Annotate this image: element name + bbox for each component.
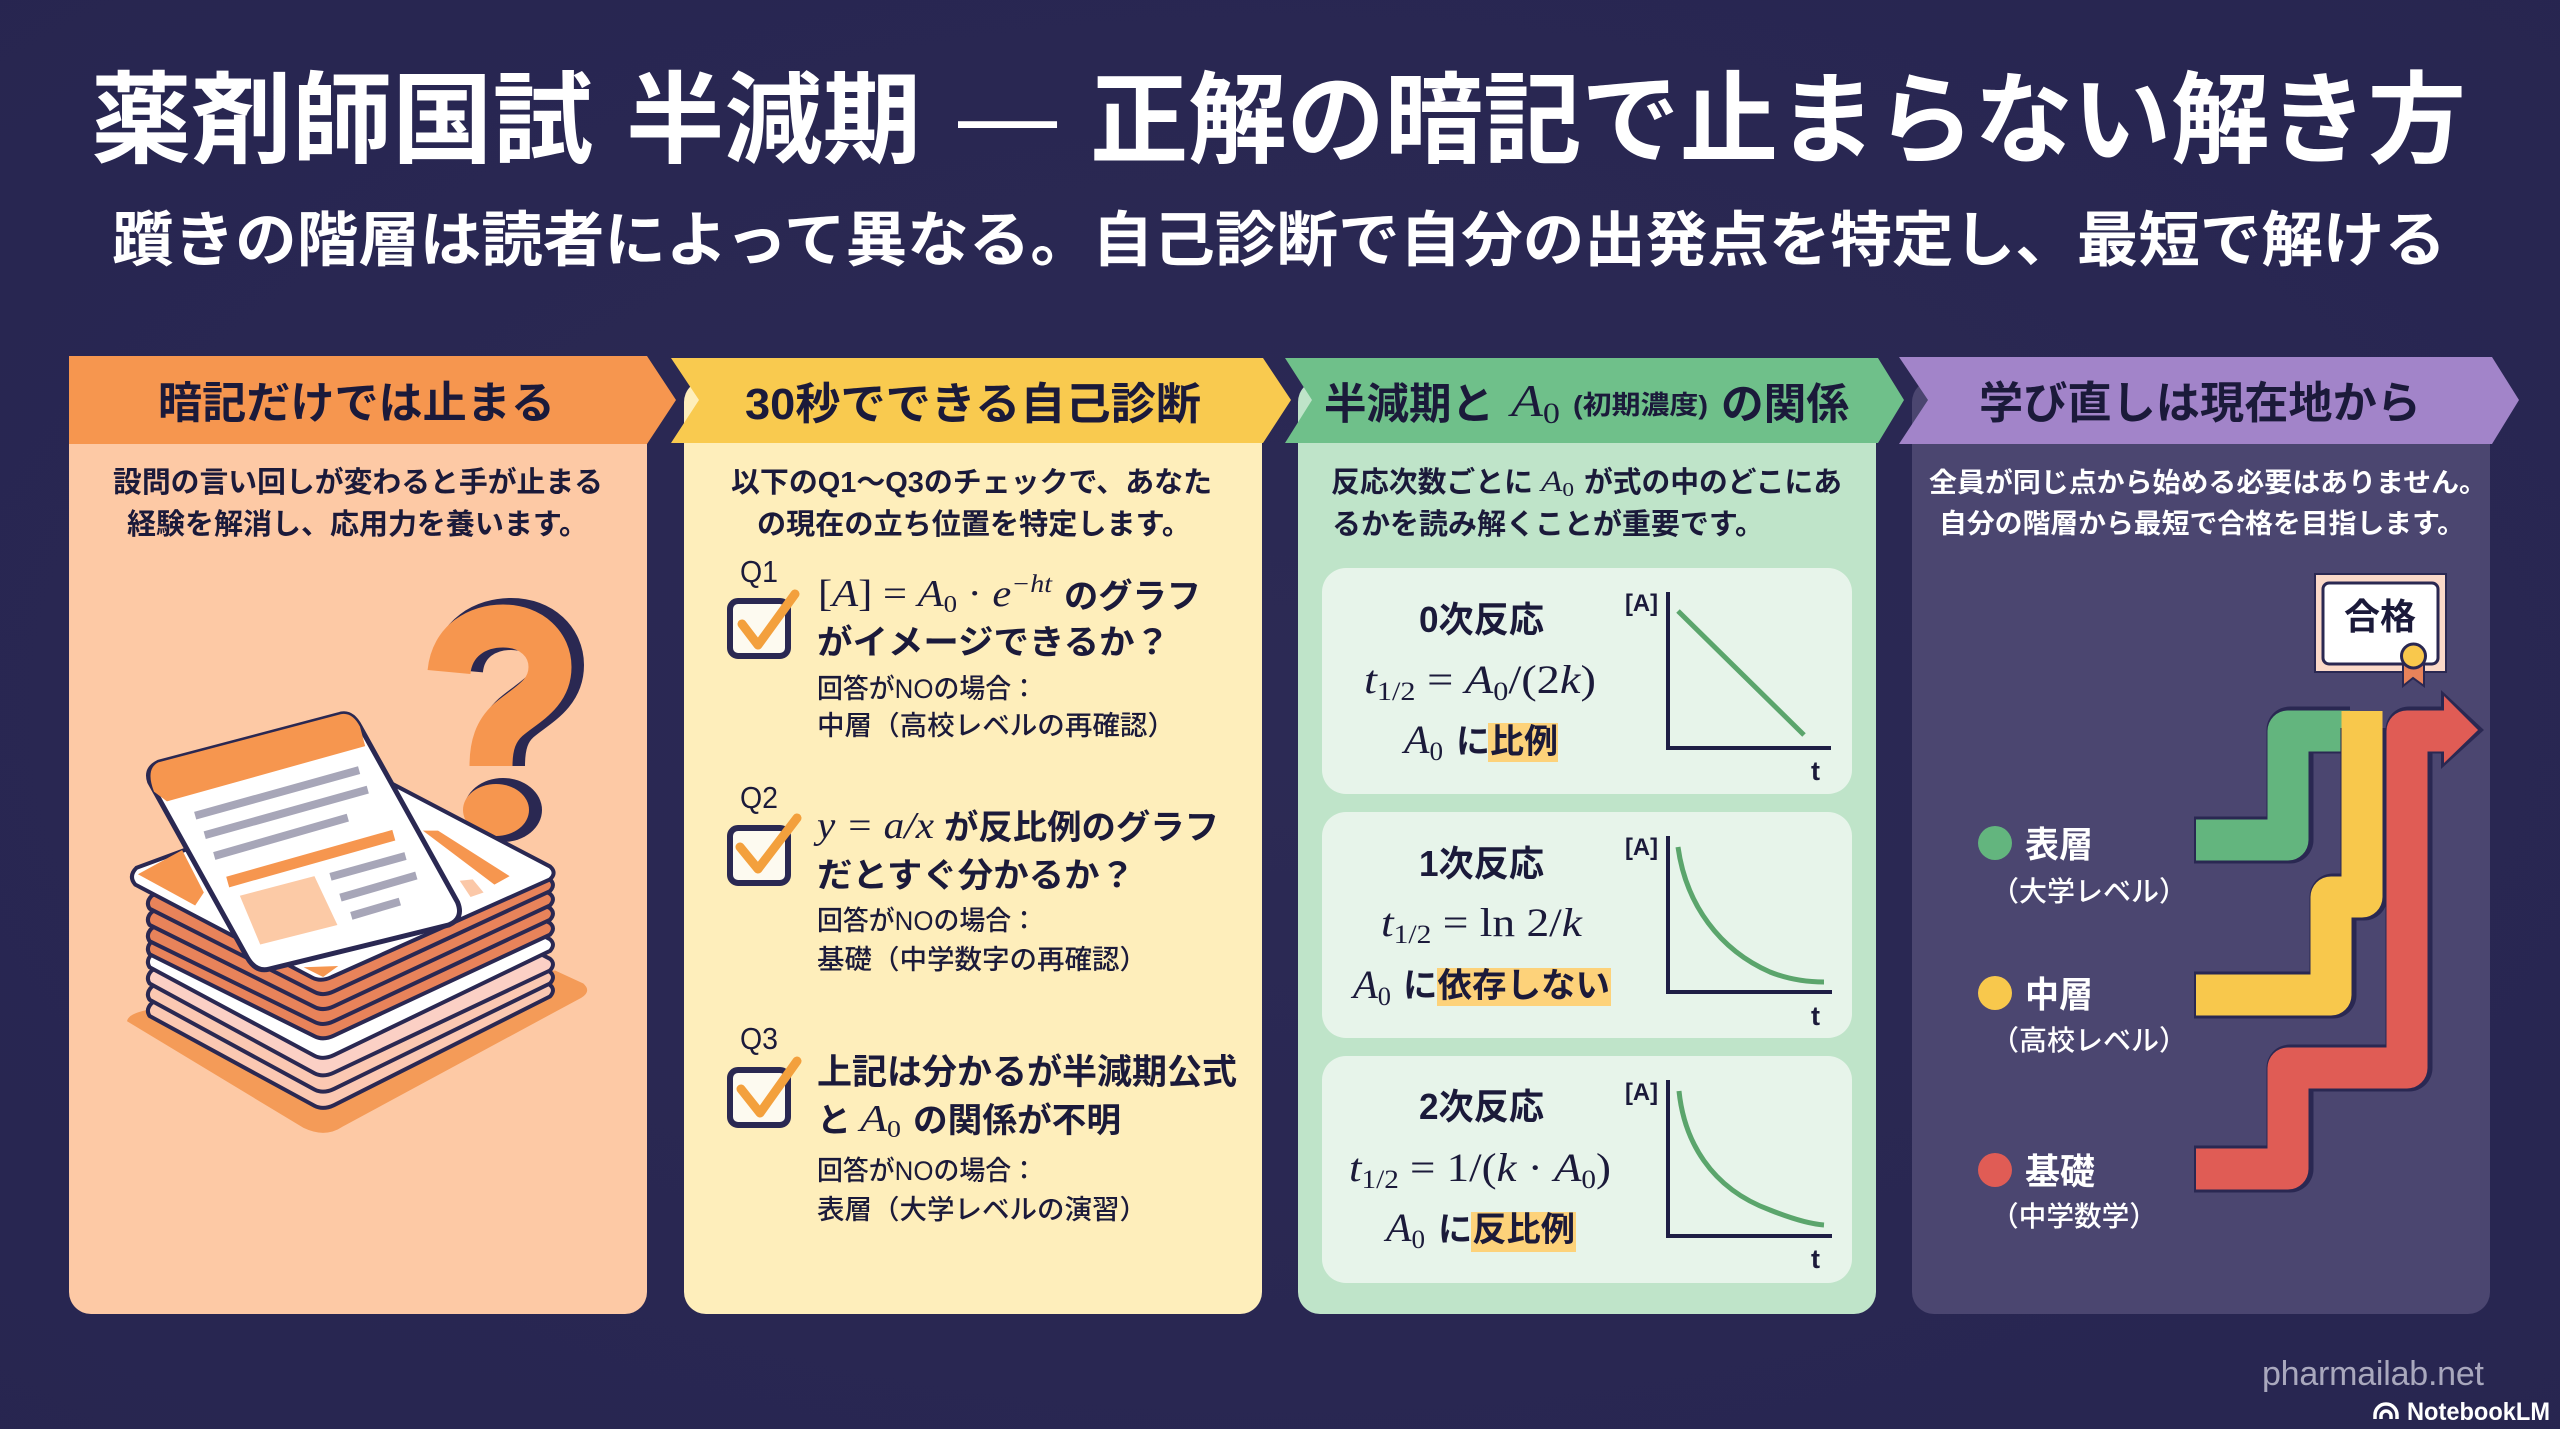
card: zero-order reaction: 0 <box>1429 737 1443 766</box>
card: zero-order reaction: t <box>1364 657 1378 702</box>
legend: basic layer: （中学数学） <box>1991 1201 2157 1232</box>
panel 4 header: 学び直しは現在地から <box>1979 379 2421 428</box>
legend: basic layer <box>1978 1151 2157 1232</box>
card: zero-order reaction: 0次反応 <box>1419 599 1544 640</box>
panel 3 header: A <box>1508 375 1544 426</box>
card: second-order reaction: k · A <box>1497 1145 1578 1190</box>
icon: stack of exam papers <box>127 714 587 1133</box>
panel 3 description: 反応次数ごとに <box>1331 465 1533 499</box>
panel: 30 second self diagnosis <box>671 358 1291 1314</box>
panel 4 description <box>1929 467 2487 539</box>
card: zero-order reaction: に比例 <box>1456 723 1558 761</box>
title: 正解の暗記で止まらない解き方 <box>1090 65 2466 177</box>
chart: zero-order decay <box>1625 590 1831 786</box>
card: first-order reaction <box>1322 812 1852 1038</box>
panel 1 header: 暗記だけでは止まる <box>158 379 555 428</box>
card: first-order reaction: 1次反応 <box>1419 843 1544 884</box>
card: first-order reaction: = ln 2/ <box>1431 900 1563 945</box>
icon: checkbox 3 <box>730 1061 797 1125</box>
panel 2 description: の現在の立ち位置を特定します。 <box>757 508 1191 541</box>
panel 1 description <box>113 465 603 541</box>
question 3: 上記は分かるが半減期公式 <box>817 1053 1237 1092</box>
card: second-order reaction: 1/2 <box>1361 1165 1399 1194</box>
icon: pass certificate: 合格 <box>2344 596 2416 637</box>
icon: question mark <box>449 624 558 842</box>
question 1: e <box>992 573 1011 615</box>
legend: surface layer <box>1978 824 2187 907</box>
chart: first-order decay: t <box>1811 1001 1820 1031</box>
card: zero-order reaction: /(2 <box>1508 657 1560 702</box>
panel 3 description: が式の中のどこにあ <box>1584 465 1842 499</box>
card: second-order reaction: 0 <box>1581 1165 1596 1194</box>
question 2: だとすぐ分かるか？ <box>817 857 1135 895</box>
panel 3 description: るかを読み解くことが重要です。 <box>1332 507 1764 541</box>
card: second-order reaction: 0 <box>1411 1225 1425 1254</box>
icon: checkbox 2 <box>730 818 797 883</box>
icon: pass certificate <box>2315 574 2446 686</box>
card: zero-order reaction: = <box>1415 657 1465 702</box>
legend: surface layer: （大学レベル） <box>1991 876 2187 907</box>
card: second-order reaction: t <box>1349 1145 1362 1190</box>
subtitle: 躓きの階層は読者によって異なる。自己診断で自分の出発点を特定し、最短で解ける <box>112 207 2446 274</box>
title: 薬剤師国試 <box>91 65 593 177</box>
title: 半減期 <box>626 65 921 177</box>
question 3 <box>730 1021 1237 1225</box>
question 2: y = a/x <box>813 805 934 847</box>
panel 1 header <box>69 356 676 444</box>
panel 3 header: の関係 <box>1721 381 1849 429</box>
question 3: Q3 <box>740 1021 778 1056</box>
question 1 <box>730 554 1201 741</box>
question 3: 回答がNOの場合： <box>817 1156 1037 1186</box>
question 1: [A] = A <box>818 573 941 615</box>
question 3: と <box>817 1102 851 1140</box>
card: first-order reaction: 1/2 <box>1394 920 1431 949</box>
card: first-order reaction: に依存しない <box>1403 967 1610 1005</box>
question 2: 回答がNOの場合： <box>817 906 1037 936</box>
panel 1 description: 設問の言い回しが変わると手が止まる <box>113 465 603 499</box>
panel 4 description: 全員が同じ点から始める必要はありません。 <box>1929 467 2487 498</box>
question 1: Q1 <box>740 554 778 589</box>
legend: surface layer: 表層 <box>2025 824 2093 865</box>
question 3: の関係が不明 <box>913 1101 1121 1140</box>
card: zero-order reaction: A <box>1461 657 1494 702</box>
question 3: A <box>857 1098 888 1140</box>
legend: middle layer: 中層 <box>2025 974 2093 1015</box>
chart: second-order decay <box>1625 1079 1832 1274</box>
panel 2 header: 30秒でできる自己診断 <box>745 380 1201 429</box>
question 3: 0 <box>887 1117 901 1143</box>
NotebookLM logo: NotebookLM <box>2407 1398 2550 1426</box>
card: zero-order reaction: A <box>1401 717 1430 762</box>
route: middle layer yellow <box>2194 711 2364 995</box>
card: zero-order reaction: 0 <box>1493 677 1508 706</box>
card: first-order reaction: k <box>1562 900 1583 945</box>
question 2 <box>730 780 1219 975</box>
panel: relearn from where you are <box>1899 357 2519 1314</box>
card: second-order reaction: に反比例 <box>1438 1211 1575 1249</box>
chart: second-order decay: t <box>1811 1244 1820 1274</box>
question 1: がイメージできるか？ <box>817 623 1170 662</box>
card: second-order reaction: ) <box>1596 1145 1611 1190</box>
card: first-order reaction: t <box>1381 900 1395 945</box>
icon: checkbox 1 <box>730 594 795 656</box>
card: first-order reaction: 0 <box>1378 982 1391 1011</box>
panel 3 header: 0 <box>1543 397 1560 430</box>
legend: middle layer <box>1978 974 2187 1056</box>
card: second-order reaction: = 1/( <box>1399 1145 1497 1190</box>
question 1: · <box>957 573 992 615</box>
route: surface layer green <box>2194 730 2350 840</box>
legend: middle layer: （高校レベル） <box>1991 1025 2187 1056</box>
panel: memorization stops <box>69 356 676 1314</box>
chart: second-order decay: [A] <box>1625 1079 1658 1106</box>
panel 3 description: A <box>1539 465 1563 498</box>
question 1: −ht <box>1011 571 1053 598</box>
question 1: 0 <box>944 592 957 618</box>
question 2: 基礎（中学数字の再確認） <box>817 945 1147 975</box>
panel 2 header <box>671 358 1291 443</box>
chart: first-order decay <box>1625 834 1832 1031</box>
title <box>91 60 2466 177</box>
source url: pharmailab.net <box>2262 1355 2485 1393</box>
card: second-order reaction: A <box>1383 1205 1412 1250</box>
panel 1 description: 経験を解消し、応用力を養います。 <box>127 508 588 541</box>
question 2: が反比例のグラフ <box>944 808 1219 847</box>
card: first-order reaction: A <box>1350 962 1378 1007</box>
question 2: Q2 <box>740 780 778 815</box>
panel 4 header <box>1899 357 2519 444</box>
card: second-order reaction: 2次反応 <box>1419 1086 1544 1127</box>
panel 3 description: 0 <box>1562 479 1574 501</box>
card: second-order reaction <box>1322 1056 1852 1283</box>
chart: zero-order decay: [A] <box>1625 590 1658 617</box>
question 3: 表層（大学レベルの演習） <box>817 1195 1147 1225</box>
chart: staircase routes to pass <box>2194 690 2484 1169</box>
card: zero-order reaction: k) <box>1560 657 1594 702</box>
panel 2 description <box>731 467 1212 541</box>
panel 3 description <box>1331 465 1842 541</box>
question 1: 中層（高校レベルの再確認） <box>817 711 1175 741</box>
panel 3 header: 半減期と <box>1324 381 1494 429</box>
legend: basic layer: 基礎 <box>2025 1151 2095 1192</box>
panel 3 header: (初期濃度) <box>1573 390 1708 420</box>
panel 4 description: 自分の階層から最短で合格を目指します。 <box>1939 509 2465 539</box>
panel 3 header <box>1285 358 1904 443</box>
chart: first-order decay: [A] <box>1625 834 1658 861</box>
question 1: のグラフ <box>1064 578 1201 616</box>
card: zero-order reaction <box>1322 568 1852 794</box>
question 1: 回答がNOの場合： <box>817 674 1037 704</box>
title: — <box>958 60 1057 172</box>
route: basic layer red with arrow <box>2194 690 2484 1169</box>
panel: half-life and A0 <box>1285 358 1904 1314</box>
panel 2 description: 以下のQ1〜Q3のチェックで、あなた <box>731 467 1212 499</box>
chart: zero-order decay: t <box>1811 756 1820 786</box>
card: zero-order reaction: 1/2 <box>1377 677 1415 706</box>
